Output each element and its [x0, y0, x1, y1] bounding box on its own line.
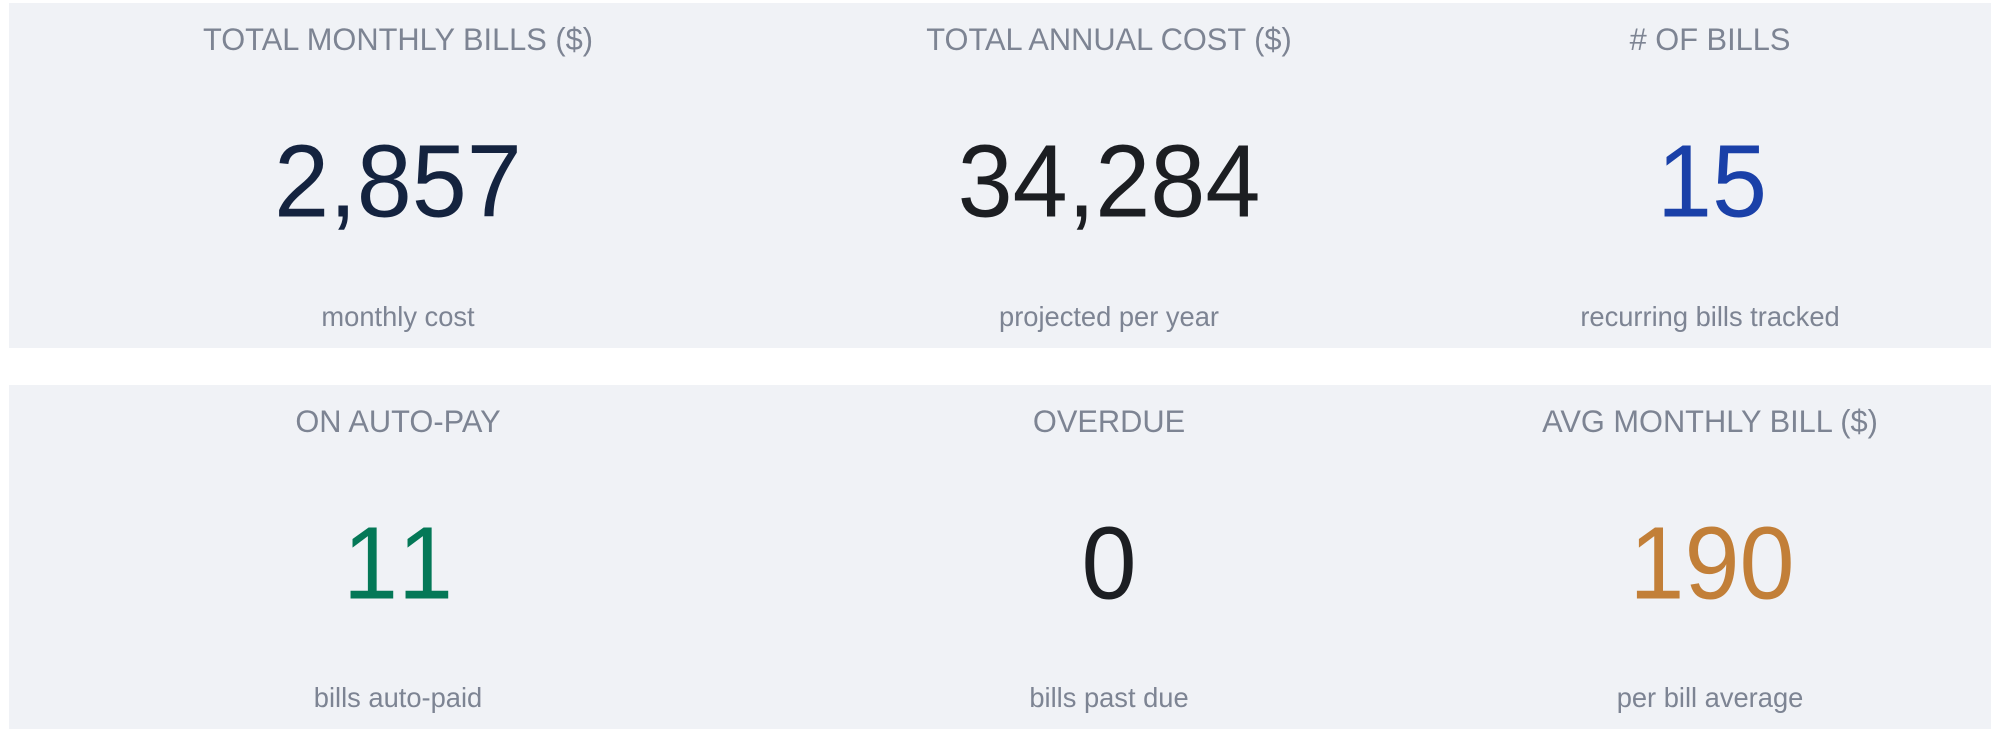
KPI: number of bills: # OF BILLS: [1630, 22, 1790, 57]
KPI: on auto-pay: 11: [343, 507, 453, 621]
KPI: average monthly bill: [1542, 404, 1878, 713]
KPI: on auto-pay: bills auto-paid: [314, 682, 482, 713]
KPI: average monthly bill: per bill average: [1617, 682, 1803, 713]
KPI: total annual cost: TOTAL ANNUAL COST ($): [926, 22, 1292, 57]
KPI: total annual cost: 34,284: [958, 125, 1260, 239]
KPI: total annual cost: [926, 22, 1292, 332]
KPI: average monthly bill: AVG MONTHLY BILL ($): [1542, 404, 1878, 439]
panel: bottom row: [9, 385, 1991, 729]
KPI: total monthly bills: [203, 22, 593, 332]
KPI: total monthly bills: 2,857: [274, 125, 522, 239]
KPI: total monthly bills: monthly cost: [321, 301, 475, 332]
KPI: overdue: [1029, 404, 1189, 713]
KPI: total monthly bills: TOTAL MONTHLY BILLS ($): [203, 22, 593, 57]
KPI: number of bills: recurring bills tracked: [1580, 301, 1840, 332]
KPI: number of bills: 15: [1657, 125, 1767, 239]
KPI: number of bills: [1580, 22, 1840, 332]
KPI: on auto-pay: [295, 404, 501, 713]
KPI: total annual cost: projected per year: [999, 301, 1219, 332]
panel: top row: [9, 3, 1991, 348]
KPI: overdue: OVERDUE: [1033, 404, 1185, 439]
KPI: overdue: 0: [1081, 507, 1137, 621]
KPI: on auto-pay: ON AUTO-PAY: [295, 404, 501, 439]
KPI: average monthly bill: 190: [1629, 507, 1795, 621]
KPI: overdue: bills past due: [1029, 682, 1189, 713]
